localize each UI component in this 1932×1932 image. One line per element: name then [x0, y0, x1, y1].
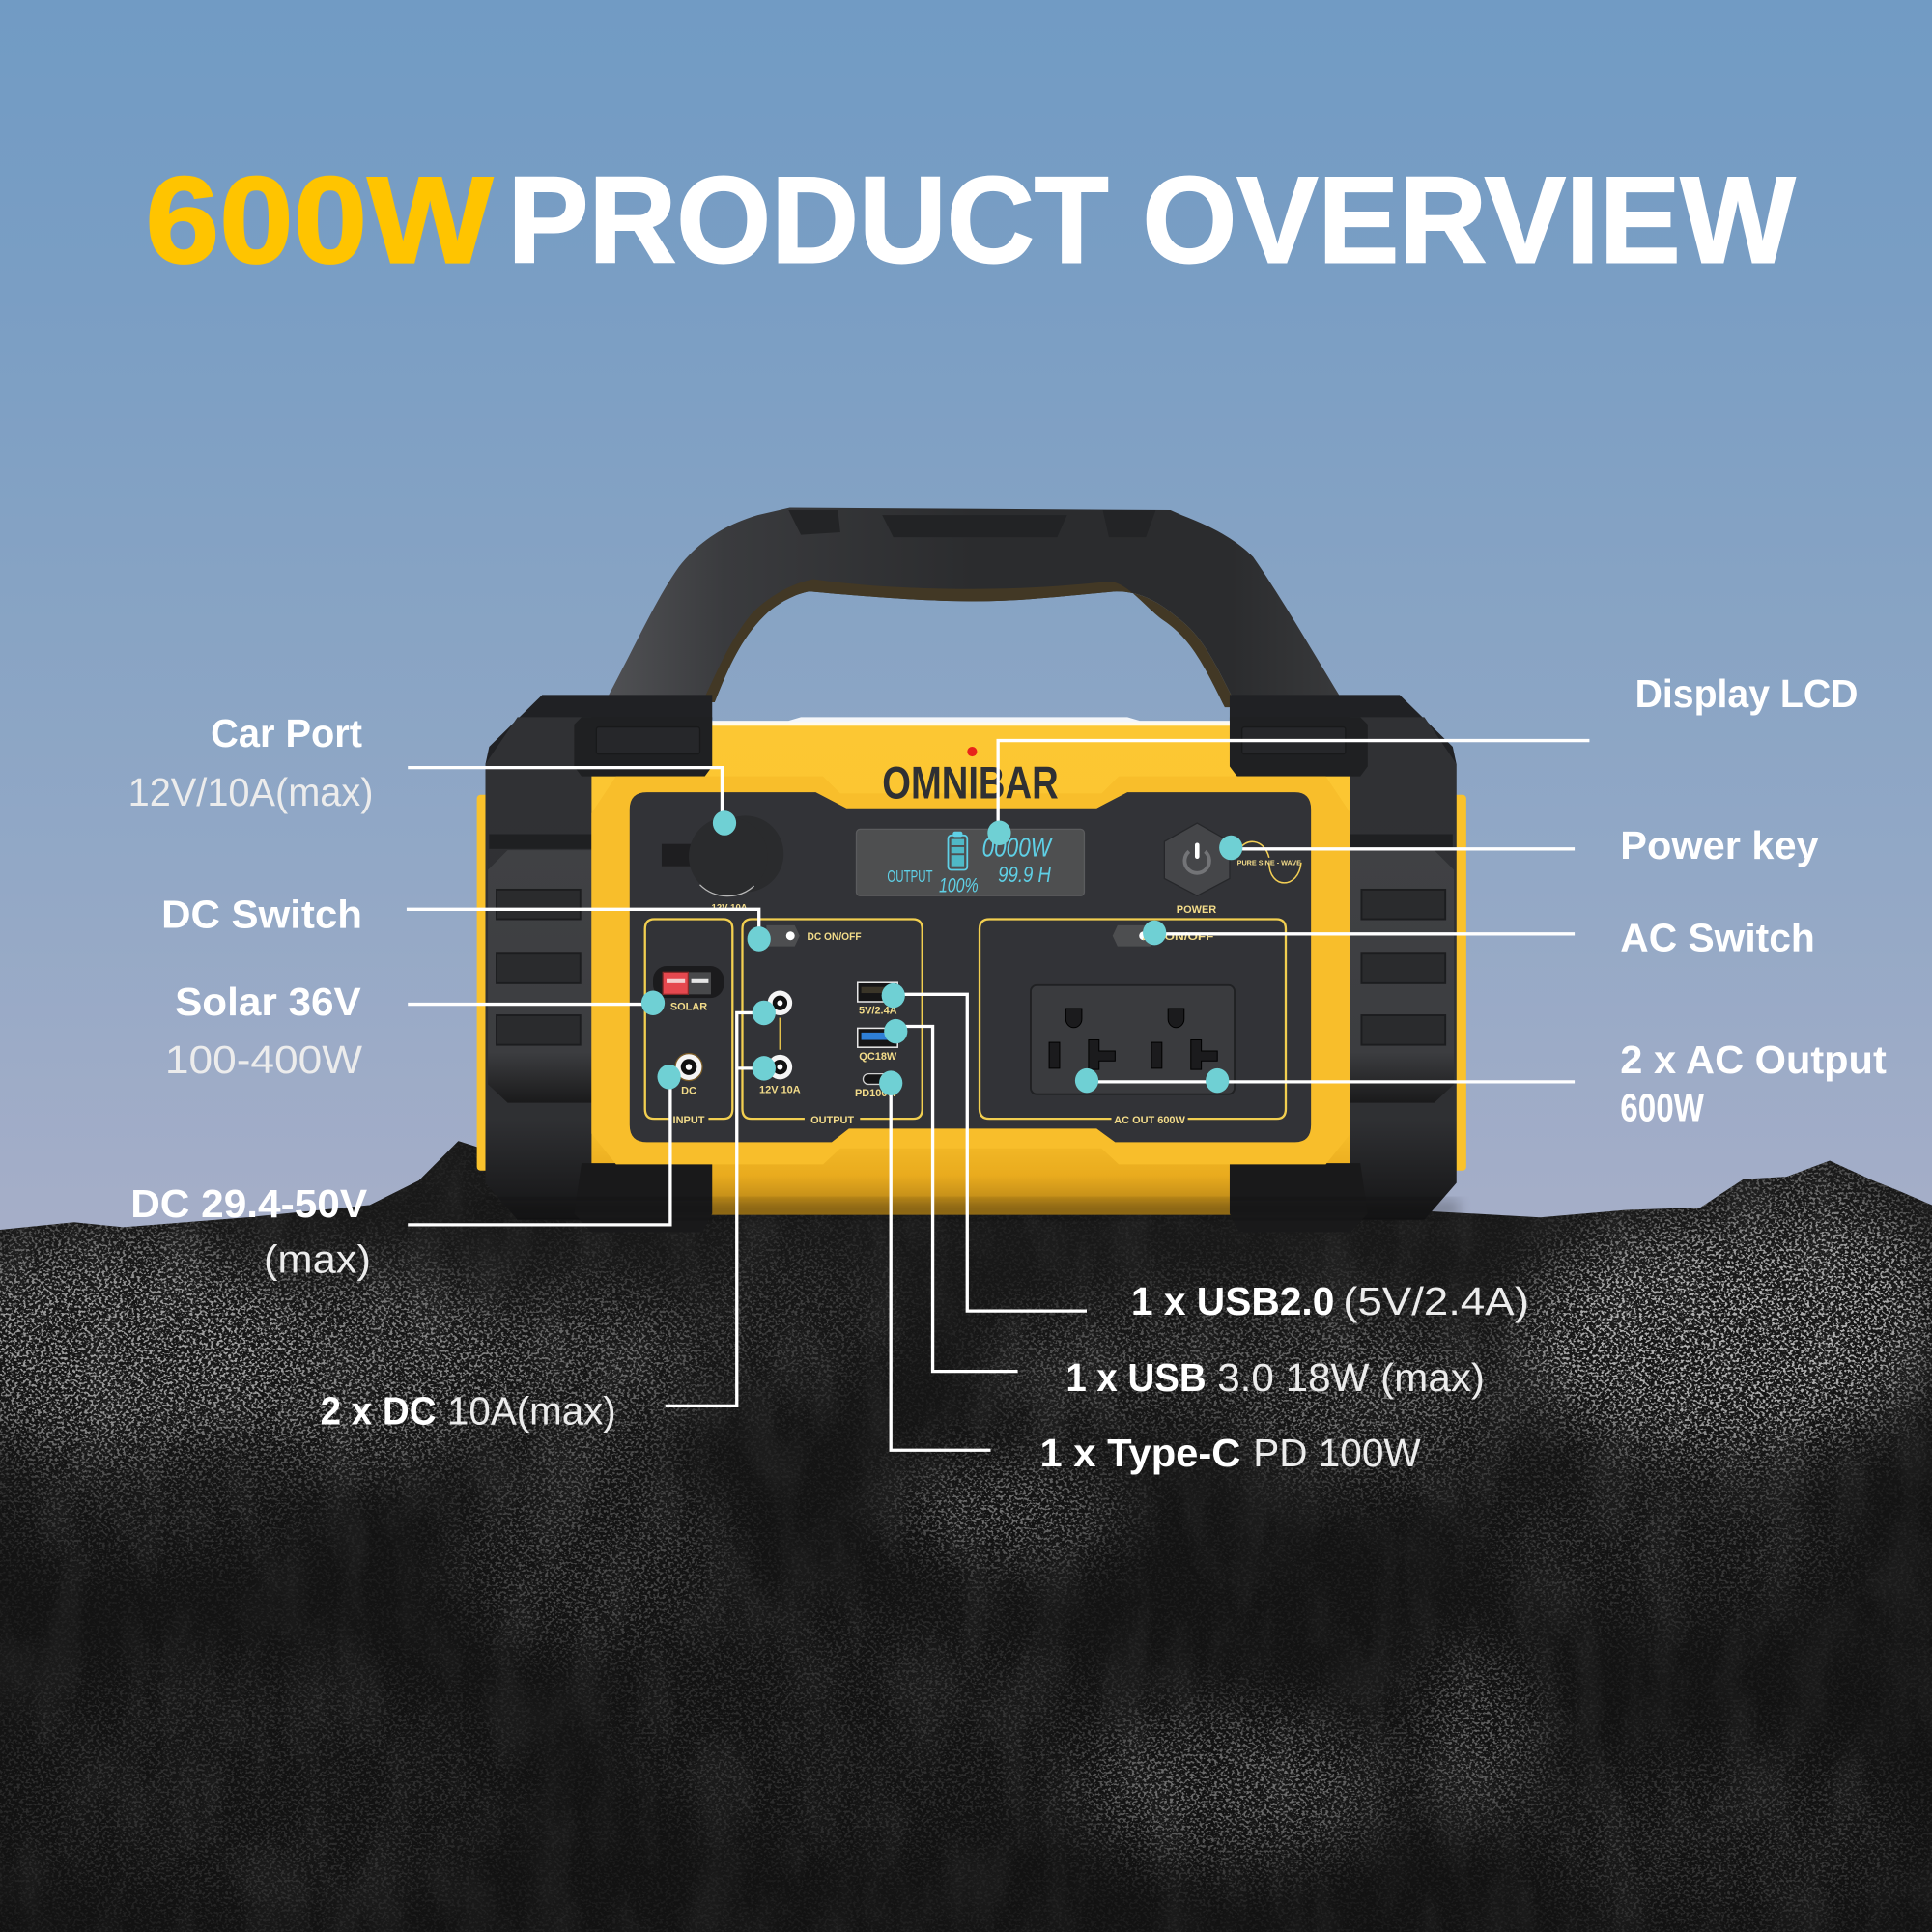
label: AC switch: AC Switch: [1620, 916, 1815, 960]
corner caps: [574, 717, 1368, 1233]
rocky ground: [0, 1109, 1932, 1932]
label: power key: Power key: [1620, 823, 1819, 867]
power key: POWER: [1177, 904, 1216, 916]
label: DC input: [130, 1181, 371, 1282]
label: Type-C: PD 100W: [1253, 1431, 1421, 1475]
power station product: [477, 508, 1466, 1233]
label: USB 2.0: 1 x USB2.0: [1131, 1279, 1334, 1323]
carry handle: [608, 508, 1341, 707]
label: AC output: 2 x AC Output: [1620, 1037, 1887, 1082]
title: 600W: [146, 153, 494, 290]
DC output ports: [759, 991, 801, 1095]
AC group outline: [980, 920, 1286, 1126]
label: Type-C: 1 x Type-C: [1040, 1431, 1240, 1475]
label: car port: Car Port: [211, 711, 362, 755]
label: DC input: (max): [264, 1237, 371, 1282]
label: DC input: DC 29.4-50V: [130, 1181, 367, 1226]
logo: [882, 747, 1059, 810]
title: PRODUCT OVERVIEW: [508, 153, 1796, 290]
AC switch: AC ON/OFF: [1142, 931, 1214, 943]
label: AC output: 600W: [1620, 1086, 1704, 1130]
label: USB 2.0: [1131, 1279, 1529, 1323]
DC input port: [675, 1054, 702, 1097]
DC output ports: 12V 10A: [759, 1084, 801, 1095]
USB ports: 5V/2.4A: [859, 1006, 897, 1017]
left bumper: [486, 695, 712, 1220]
yellow main body: [579, 722, 1363, 1215]
AC switch: [1113, 925, 1214, 947]
LCD display: OUTPUT: [887, 867, 933, 886]
label: USB 2.0: (5V/2.4A): [1343, 1279, 1529, 1323]
AC group outline: AC OUT 600W: [1114, 1115, 1186, 1126]
lighter yellow faceplate rim: [591, 777, 1350, 1164]
right bumper: [1230, 695, 1457, 1220]
ground shadow over base: [486, 1200, 1459, 1217]
label: solar: Solar 36V: [175, 980, 361, 1024]
LCD display: 99.9 H: [998, 862, 1051, 887]
car port: [662, 815, 783, 914]
label: DC switch: DC Switch: [161, 892, 362, 936]
logo: OMNIBAR: [882, 758, 1059, 810]
callout marker dots: [641, 810, 1242, 1095]
USB ports: [855, 982, 897, 1099]
output group outline: OUTPUT: [810, 1115, 854, 1126]
control panel: [630, 792, 1311, 1142]
input group outline: INPUT: [673, 1115, 705, 1126]
car port: 12V 10A: [712, 903, 748, 914]
label: USB 3.0: [1065, 1355, 1485, 1400]
output group outline: [742, 920, 923, 1126]
label: 2 x DC: [321, 1388, 616, 1433]
LCD display: [856, 829, 1084, 896]
yellow side slivers: [477, 795, 1466, 1171]
LCD display: 0000W: [982, 832, 1053, 862]
LCD display: 100%: [939, 872, 979, 896]
pure sine wave mark: [1237, 841, 1301, 883]
label: car port: 12V/10A(max): [128, 770, 373, 814]
label: car port: [128, 711, 373, 814]
label: 2 x DC: 10A(max): [447, 1388, 616, 1433]
USB ports: QC18W: [859, 1051, 897, 1063]
solar connector: SOLAR: [670, 1001, 707, 1012]
AC outlet: [1031, 985, 1235, 1094]
label: solar: 100-400W: [165, 1037, 363, 1082]
DC switch: DC ON/OFF: [807, 931, 862, 943]
label: Type-C: [1040, 1431, 1421, 1475]
pure sine wave mark: PURE SINE - WAVE: [1237, 859, 1301, 867]
body top highlight: [712, 717, 1233, 725]
solar connector: [653, 966, 724, 1012]
label: USB 3.0: 3.0 18W (max): [1217, 1355, 1485, 1400]
callout leader lines: [407, 741, 1589, 1450]
battery icon: [949, 833, 967, 870]
label: display LCD: Display LCD: [1635, 671, 1858, 716]
label: 2 x DC: 2 x DC: [321, 1388, 437, 1433]
label: solar: [165, 980, 363, 1082]
label: AC output: [1620, 1037, 1887, 1130]
label: USB 3.0: 1 x USB: [1065, 1355, 1207, 1400]
input group outline: [645, 920, 732, 1126]
power key: [1164, 823, 1230, 916]
DC input port: DC: [681, 1086, 696, 1097]
USB ports: PD100W: [855, 1088, 897, 1099]
DC switch: [766, 925, 862, 947]
